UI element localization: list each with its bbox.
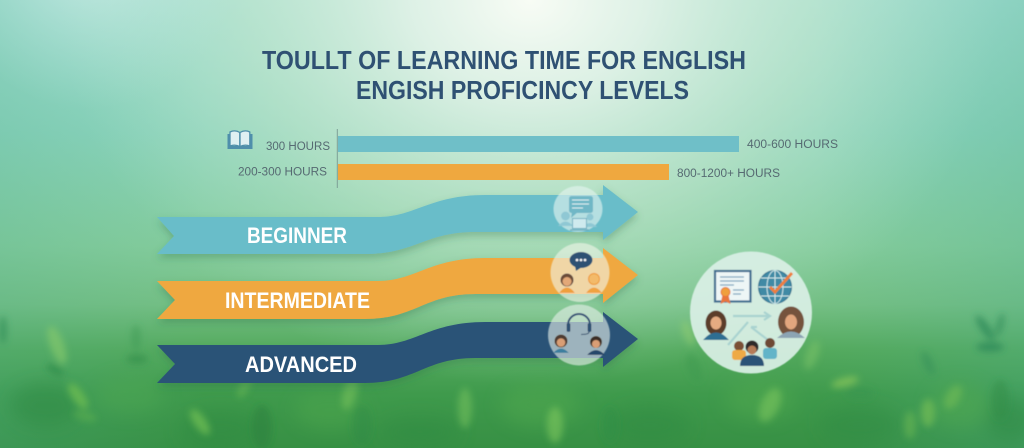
bar labels: 200-300 HOURS: [238, 164, 327, 178]
blurred foliage: [0, 313, 1024, 448]
bar labels: 400-600 HOURS: [747, 137, 838, 151]
bar labels: 800-1200+ HOURS: [677, 166, 780, 180]
title: ENGISH PROFICINCY LEVELS: [356, 76, 689, 105]
label: beginner: BEGINNER: [247, 224, 347, 248]
icon: globe: [758, 270, 792, 304]
icon: beginner circle: [554, 186, 602, 232]
title: TOULLT OF LEARNING TIME FOR ENGLISH: [262, 46, 746, 75]
title: [262, 46, 746, 105]
bar labels: [238, 137, 838, 180]
arrows between people: [728, 312, 770, 345]
icon: woman right: [777, 306, 805, 338]
icon: advanced circle: [548, 304, 610, 366]
icon: group of people: [732, 338, 777, 366]
bar: orange: [338, 164, 669, 180]
arrow: beginner: [157, 185, 638, 254]
icon: certificate: [715, 271, 750, 304]
arrow: advanced: [157, 312, 638, 383]
icon: book: [228, 131, 252, 149]
icon: woman left: [703, 310, 729, 340]
label: intermediate: INTERMEDIATE: [225, 289, 370, 313]
label: advanced: ADVANCED: [245, 353, 357, 377]
bar: teal: [338, 136, 739, 152]
icon: intermediate circle: [550, 243, 610, 302]
icon: outcomes circle: [690, 252, 812, 374]
bar chart: [238, 129, 838, 188]
bar labels: 300 HOURS: [266, 139, 330, 153]
arrow: intermediate: [157, 248, 638, 319]
